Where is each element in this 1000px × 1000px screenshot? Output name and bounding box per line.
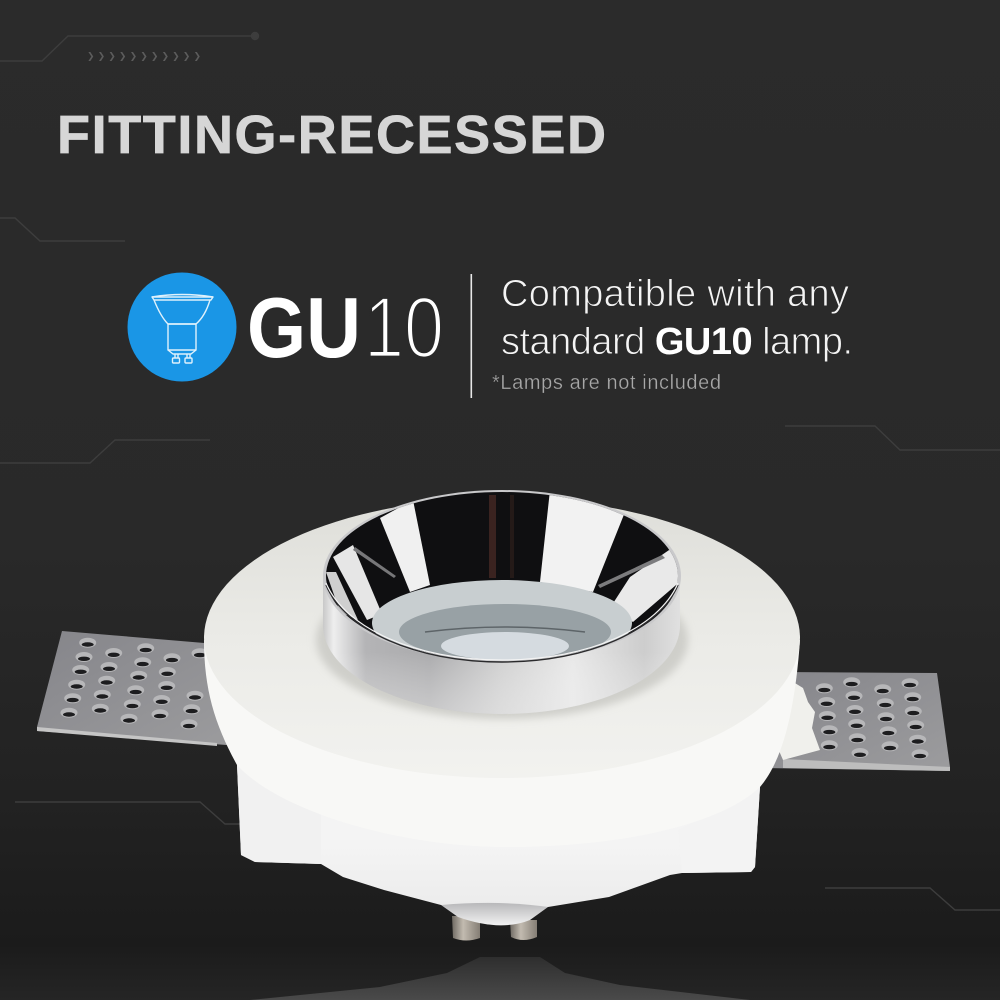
GU10 pins	[452, 916, 537, 940]
compatibility text	[501, 273, 853, 363]
product: recessed plaster fitting	[37, 490, 950, 940]
divider	[470, 274, 472, 398]
lens	[372, 580, 632, 654]
plaster flange step	[204, 640, 800, 847]
compatibility text: standard GU10 lamp.	[501, 321, 853, 363]
compatibility text: Compatible with any	[501, 273, 849, 315]
title: FITTING-RECESSED	[57, 105, 606, 165]
right perforated plate	[760, 672, 950, 771]
chrome ring	[323, 490, 682, 714]
note: lamps not included: *Lamps are not included	[492, 372, 721, 394]
floor reflection	[250, 957, 750, 1000]
icon: GU10 lamp	[128, 272, 236, 382]
left perforated plate	[37, 631, 240, 746]
GU10 badge	[128, 272, 444, 382]
chevron row: ❯❯❯❯❯❯❯❯❯❯❯	[87, 52, 201, 62]
GU10 wordmark: 10	[364, 280, 444, 376]
reflector streaks	[540, 490, 625, 592]
plaster top disc	[204, 498, 800, 778]
GU10 wordmark: GU	[247, 281, 361, 376]
GU10 wordmark	[247, 280, 444, 376]
plaster lower body	[237, 700, 760, 925]
